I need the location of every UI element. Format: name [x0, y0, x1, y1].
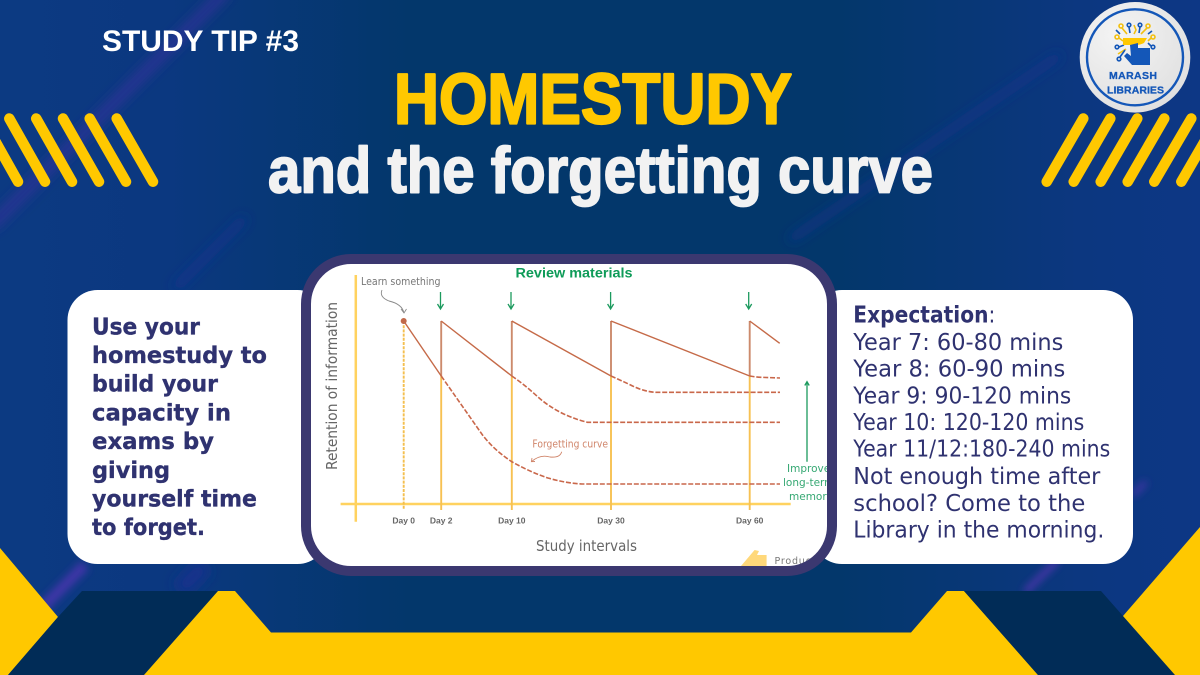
dashed forgetting curves: [441, 376, 780, 484]
text: tip message: to forget.: [92, 515, 205, 541]
logo: Marash Libraries: [1080, 2, 1190, 113]
day labels: Day 2: [430, 516, 453, 526]
text: homestudy expectations: Year 7: 60-80 mins: [852, 330, 1063, 356]
subtitle: and the forgetting curve: [268, 134, 933, 206]
label: improve long-term memory: Improve: [787, 463, 830, 475]
icon: circuit lines: [1115, 23, 1155, 61]
text: tip message: capacity in: [92, 400, 231, 426]
solid review curves: [404, 321, 780, 376]
right diagonal stripes: [1047, 118, 1200, 182]
title: HOMESTUDY: [394, 60, 792, 140]
axes: [341, 275, 791, 522]
source logo: [741, 550, 810, 566]
panel: left tip card: [68, 290, 328, 564]
arrow: improvement: [805, 382, 809, 462]
panel: right expectation card: [812, 290, 1133, 564]
bottom decorative shapes: [0, 527, 1200, 675]
panel: forgetting curve chart: [306, 259, 834, 571]
label: forgetting curve: Forgetting curve: [532, 438, 608, 450]
text: homestudy expectations: Not enough time after: [853, 464, 1101, 490]
text: tip message: yourself time: [92, 486, 257, 512]
text: homestudy expectations: Expectation:: [853, 302, 995, 328]
text: homestudy expectations: school? Come to the: [853, 491, 1085, 517]
source logo: Productive: [774, 556, 833, 567]
text: tip message: [92, 314, 267, 541]
label: improve long-term memory: memory: [789, 491, 833, 503]
day labels: Day 0: [392, 516, 415, 526]
text: homestudy expectations: Year 8: 60-90 mins: [852, 357, 1065, 383]
review arrows: [438, 292, 752, 309]
label: improve long-term memory: [784, 464, 827, 500]
icon: yellow book: [1123, 38, 1147, 45]
icon: blue hand: [1124, 43, 1150, 65]
logo wordmark: LIBRARIES: [1107, 84, 1164, 96]
left diagonal stripes: [0, 118, 153, 182]
text: tip message: homestudy to: [92, 343, 267, 369]
arrow: learn something: [381, 290, 406, 313]
day labels: Day 30: [597, 516, 625, 526]
text: tip message: build your: [92, 372, 219, 398]
day labels: [392, 518, 763, 525]
logo wordmark: [1107, 70, 1164, 96]
text: homestudy expectations: Year 11/12:180-240 mins: [852, 437, 1110, 463]
text: homestudy expectations: Library in the morning.: [853, 517, 1104, 543]
text: tip message: exams by: [92, 429, 214, 455]
start point: [401, 318, 407, 324]
y axis label: Retention of information: [323, 302, 341, 470]
x axis label: Study intervals: [536, 537, 637, 555]
text: homestudy expectations: [852, 302, 1110, 543]
arrow: forgetting curve: [531, 452, 562, 462]
day labels: Day 10: [498, 516, 526, 526]
chart: forgetting curve: [323, 266, 834, 567]
day labels: Day 60: [736, 516, 764, 526]
label: learn something: Learn something: [361, 276, 440, 288]
eyebrow: study tip: STUDY TIP #3: [102, 25, 299, 58]
day markers: [404, 321, 750, 510]
logo wordmark: MARASH: [1109, 70, 1157, 82]
heading: review materials: Review materials: [516, 266, 632, 280]
label: improve long-term memory: long-term: [783, 477, 834, 489]
text: tip message: Use your: [92, 314, 201, 340]
text: tip message: giving: [92, 458, 170, 484]
text: homestudy expectations: Year 9: 90-120 mins: [852, 383, 1071, 409]
text: homestudy expectations: Year 10: 120-120 mins: [852, 410, 1084, 436]
